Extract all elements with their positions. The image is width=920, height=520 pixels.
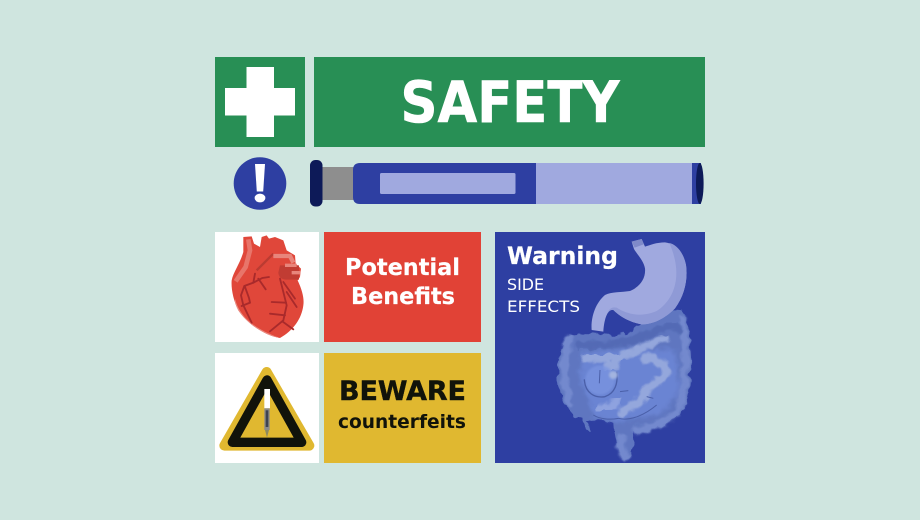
panel: first aid cross [215, 57, 305, 147]
text: Benefits: Benefits [351, 282, 455, 310]
text: counterfeits: counterfeits [338, 411, 466, 433]
panel: heart illustration [215, 232, 319, 342]
text: BEWARE: BEWARE [339, 376, 466, 407]
panel: warning triangle [215, 353, 319, 463]
text: Potential: Potential [345, 253, 460, 281]
panel: beware counterfeits [324, 353, 481, 463]
icon: heart [232, 235, 304, 338]
icon: triangle with pen [224, 372, 309, 446]
icon: intestines [557, 310, 691, 458]
text: EFFECTS: EFFECTS [507, 297, 580, 316]
text: SIDE: SIDE [507, 275, 544, 294]
panel: safety title [314, 57, 705, 147]
icon: white cross [225, 67, 295, 137]
heading: Warning: Warning [507, 242, 618, 270]
panel: potential benefits [324, 232, 481, 342]
icon: stomach [592, 239, 687, 332]
panel: warning side effects [495, 232, 705, 463]
heading: SAFETY: SAFETY [400, 70, 620, 136]
icon: exclamation mark [234, 157, 286, 210]
icon: injection pen [310, 160, 704, 206]
